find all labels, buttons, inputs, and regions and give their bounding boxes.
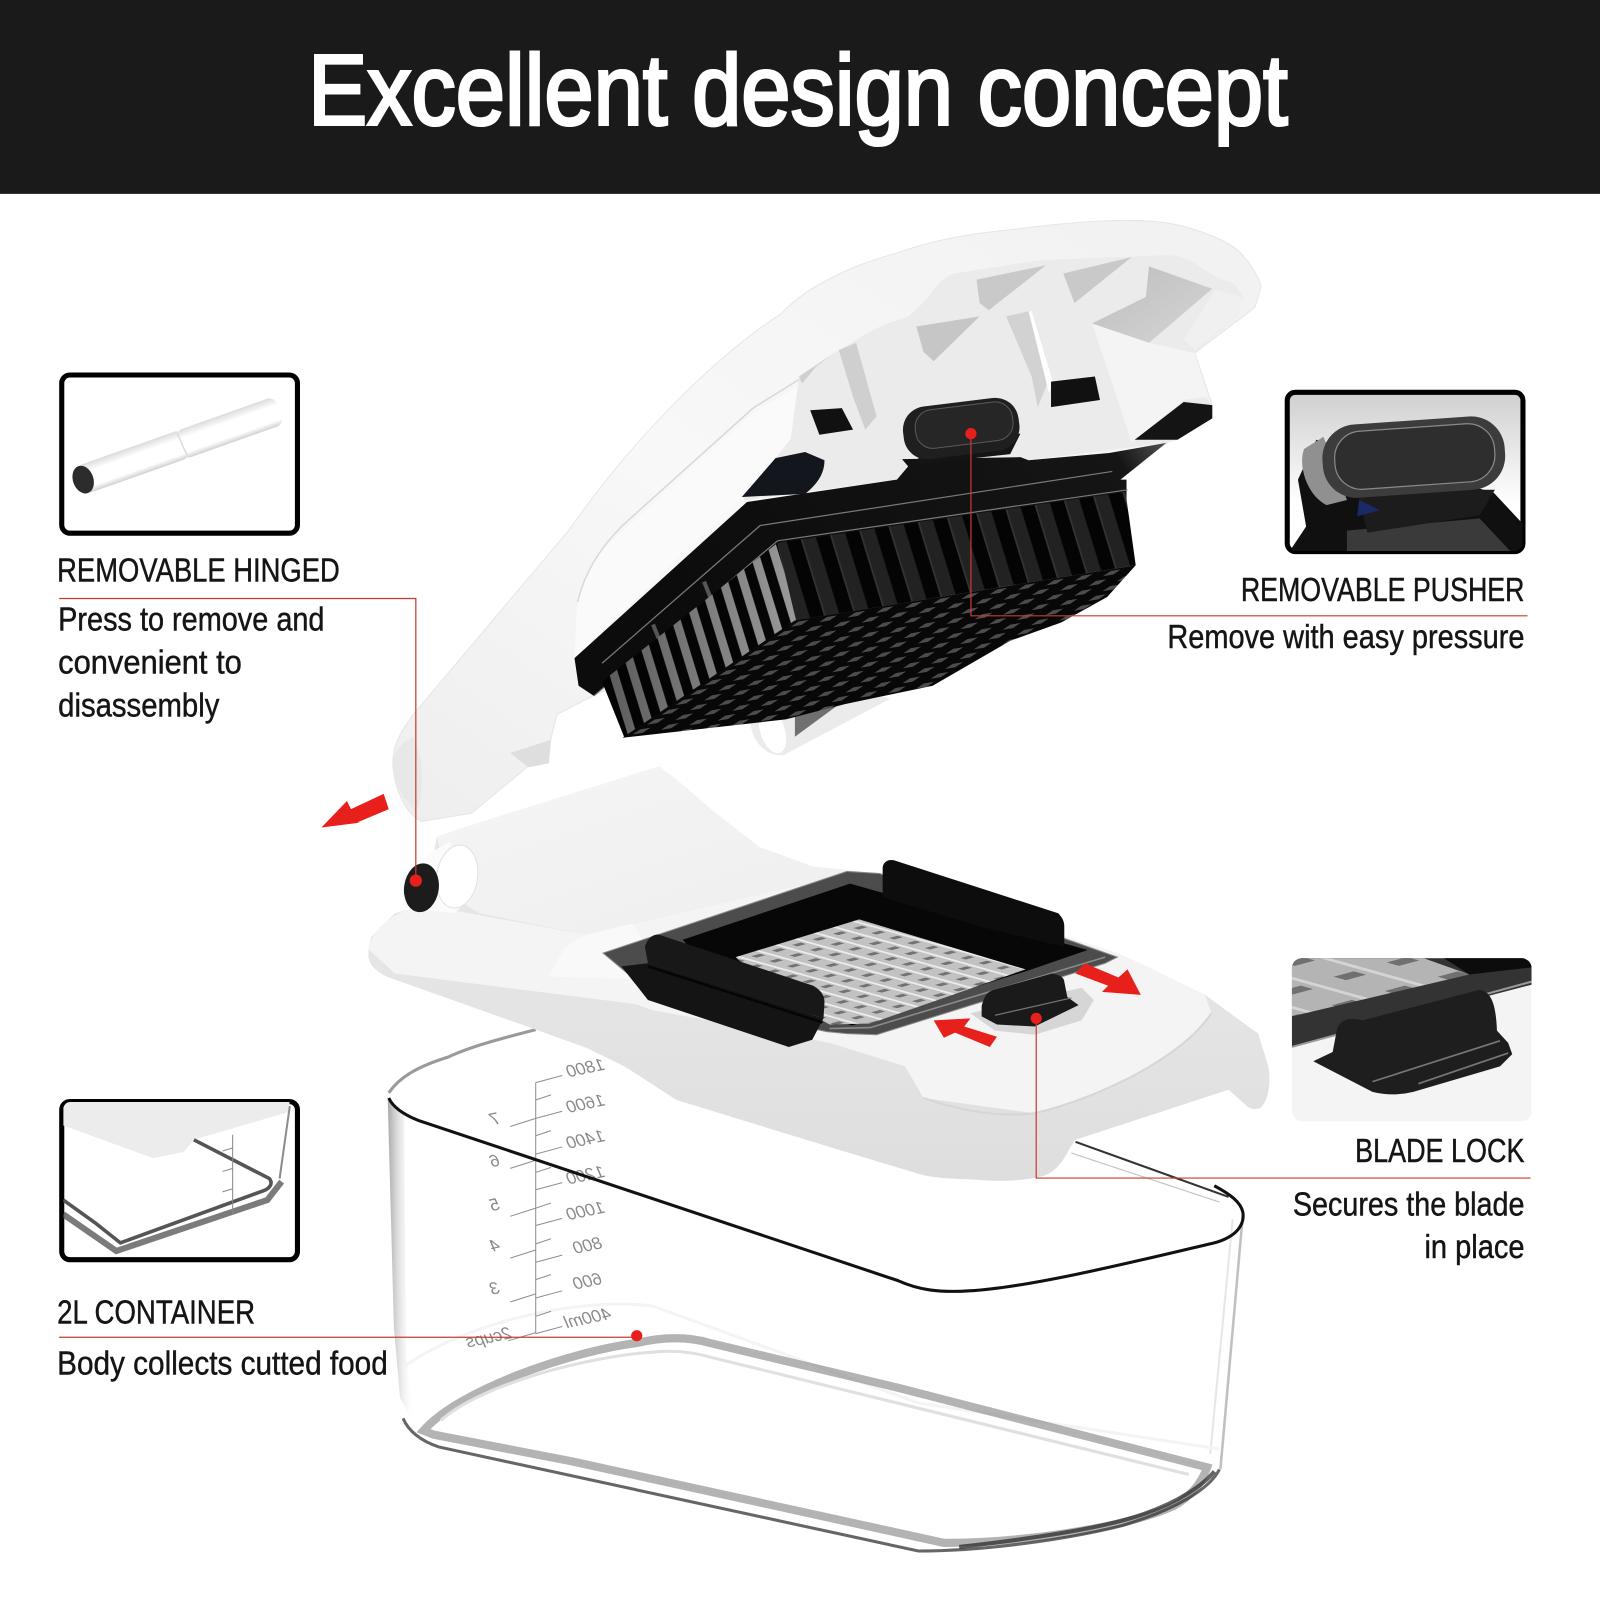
black slots and pads xyxy=(742,377,1212,497)
scale numbers: 600 xyxy=(571,1268,604,1294)
heading: BLADE LOCK xyxy=(1355,1133,1525,1170)
scale numbers: 1400 xyxy=(564,1125,606,1153)
thumbnail: hinge pin xyxy=(62,375,297,533)
lower hinge bracket behind blades xyxy=(750,679,890,757)
heading: REMOVABLE HINGED xyxy=(57,553,340,590)
blade tips grid xyxy=(622,565,1136,738)
description: Remove with easy pressure xyxy=(1167,619,1524,656)
tray front lip xyxy=(830,957,1105,1029)
panel: removable hinged xyxy=(57,375,340,724)
panel: removable pusher xyxy=(1167,392,1524,656)
scale numbers: 800 xyxy=(571,1232,604,1258)
callout leader: pusher xyxy=(965,428,1528,616)
blade tray xyxy=(603,860,1117,1047)
base body xyxy=(368,766,1269,1181)
thumbnail: lock tab xyxy=(1292,958,1532,1121)
right tray handle xyxy=(883,860,1064,947)
thumbnail: container corner xyxy=(62,1102,297,1260)
left wall shading xyxy=(388,1100,414,1423)
faint fill level curves xyxy=(403,1304,1219,1449)
heading: 2L CONTAINER xyxy=(57,1294,255,1331)
grate xyxy=(736,919,1026,1024)
description xyxy=(1293,1186,1524,1266)
base ring xyxy=(403,1338,1219,1551)
scale numbers: 7 xyxy=(487,1108,501,1130)
pusher button xyxy=(900,395,1022,464)
scale numbers: 6 xyxy=(488,1150,501,1171)
interior recess xyxy=(742,255,1244,500)
scale numbers: 1200 xyxy=(564,1161,606,1189)
title: Excellent design concept xyxy=(308,34,1288,146)
description: Secures the blade xyxy=(1293,1186,1524,1223)
icon: chopper upper lid with blade block xyxy=(393,220,1261,821)
callout leader: hinged xyxy=(59,598,422,887)
blades left face xyxy=(602,543,796,738)
header banner xyxy=(0,0,1600,194)
left tray handle xyxy=(621,935,824,1047)
front rim xyxy=(389,1098,1243,1291)
description: Body collects cutted food xyxy=(57,1345,388,1382)
icon: chopper base with tray xyxy=(368,766,1269,1181)
hinge barrel shading xyxy=(393,737,422,811)
hinge pin end xyxy=(401,842,482,914)
body top surface xyxy=(368,871,1211,1113)
scale numbers: 3 xyxy=(488,1277,501,1299)
left inner panel xyxy=(574,384,824,658)
scale numbers: 1000 xyxy=(564,1197,606,1224)
blade block frame xyxy=(574,443,1166,696)
description: convenient to xyxy=(58,644,242,681)
description: Press to remove and xyxy=(58,602,324,639)
description xyxy=(58,602,324,724)
panel: blade lock xyxy=(1292,958,1532,1266)
scale numbers: 1600 xyxy=(564,1090,606,1117)
description: in place xyxy=(1424,1229,1524,1266)
scale numbers: 4 xyxy=(488,1234,501,1256)
scale numbers: 400ml xyxy=(561,1303,613,1333)
icon: glass container xyxy=(388,1030,1243,1551)
interior ribs xyxy=(799,257,1244,443)
measuring scale xyxy=(508,1076,562,1341)
arrow: slide left xyxy=(934,1018,997,1047)
scale numbers xyxy=(464,1054,613,1352)
right wall edge xyxy=(1220,1214,1243,1469)
callout leader: blade lock xyxy=(1031,1013,1531,1178)
description: disassembly xyxy=(58,687,220,724)
callout leader: container xyxy=(59,1330,642,1341)
scale numbers: 1800 xyxy=(564,1054,606,1081)
icon: pin xyxy=(69,396,284,497)
white lid shell xyxy=(393,220,1261,821)
scale numbers: 5 xyxy=(488,1194,501,1215)
scale numbers: 2cups xyxy=(464,1322,514,1352)
hinge hump xyxy=(437,766,858,935)
arrow: pull out hinge xyxy=(321,794,389,828)
thumbnail: pusher xyxy=(1287,392,1523,552)
arrow: slide right xyxy=(1076,963,1141,995)
blade lock tab xyxy=(970,973,1094,1035)
blades right face xyxy=(778,492,1136,620)
panel: 2L container xyxy=(57,1102,388,1382)
back rim xyxy=(389,1030,536,1093)
heading: REMOVABLE PUSHER xyxy=(1241,572,1524,609)
frame highlights xyxy=(594,471,1128,696)
